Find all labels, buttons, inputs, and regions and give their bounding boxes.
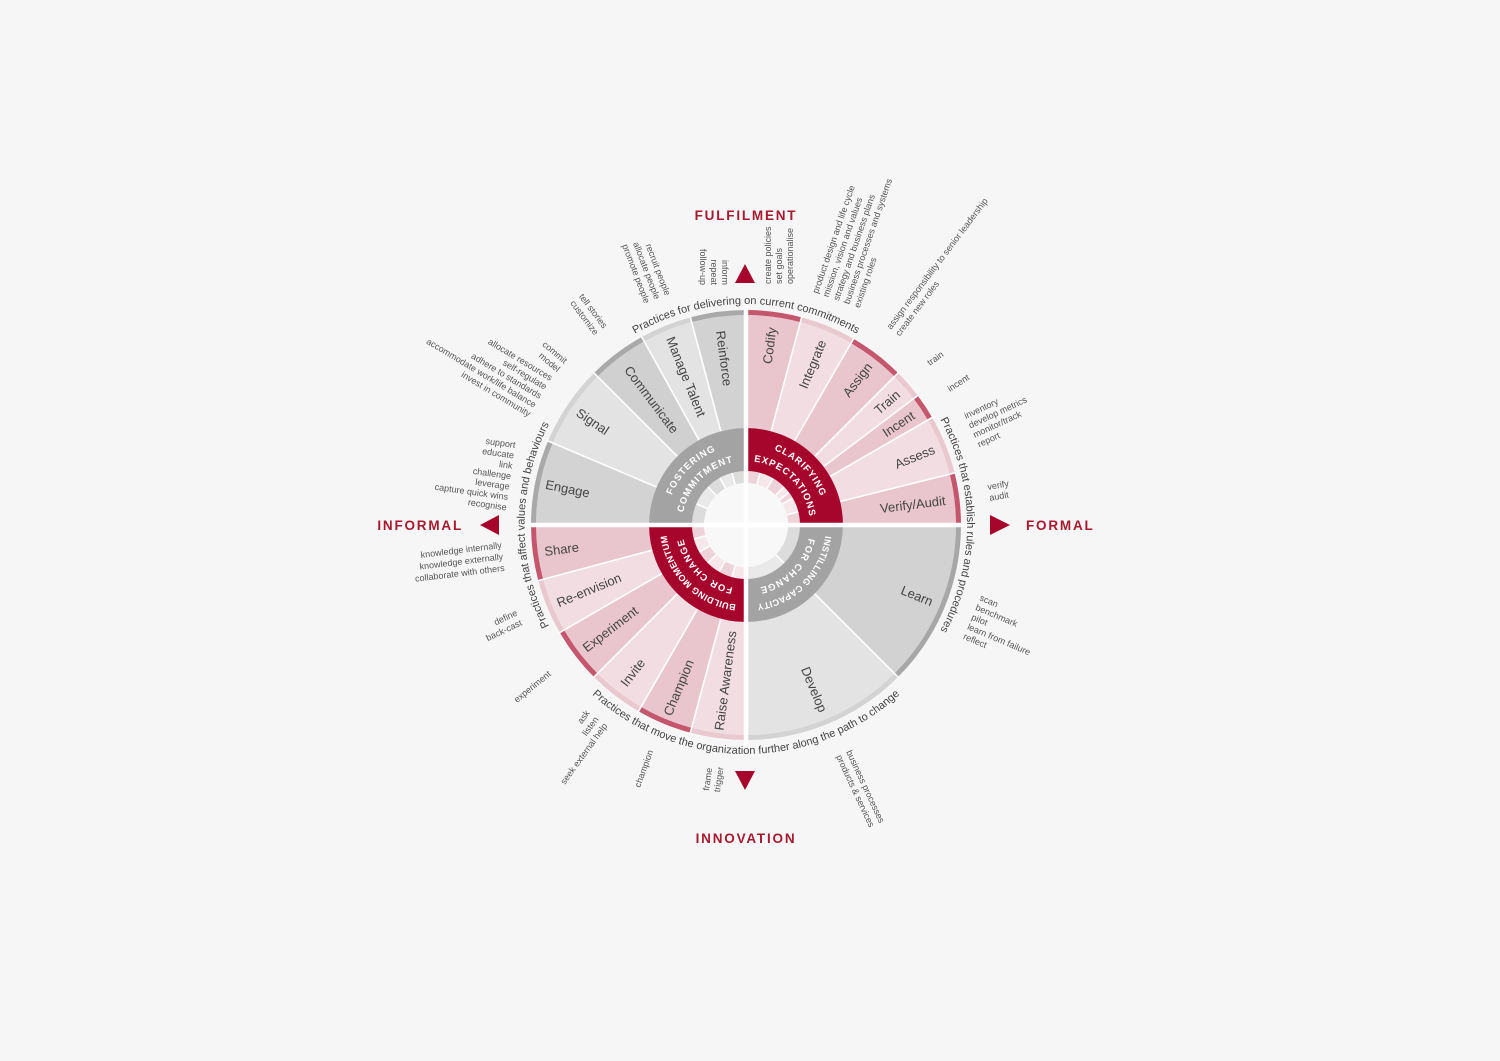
annotations: model bbox=[537, 351, 562, 374]
annotations: create new roles bbox=[893, 279, 941, 338]
annotations: scan bbox=[978, 593, 1000, 609]
annotations: incent bbox=[946, 372, 972, 394]
annotations: benchmark bbox=[974, 602, 1019, 629]
axis label: Formal bbox=[990, 515, 1095, 535]
annotations: promote people bbox=[620, 243, 652, 305]
wedge labels: Develop bbox=[798, 665, 830, 714]
annotations: support bbox=[485, 436, 517, 450]
category ring: Fostering Commitment: FOSTERING bbox=[666, 446, 714, 495]
annotations: experiment bbox=[512, 668, 553, 705]
annotations: develop metrics bbox=[967, 394, 1029, 430]
annotations: set goals bbox=[774, 247, 784, 284]
annotations: educate bbox=[482, 446, 515, 460]
annotations: train bbox=[925, 349, 945, 368]
annotations: commit bbox=[540, 339, 570, 366]
annotations bbox=[412, 166, 1044, 830]
category ring: Building Momentum for Change: BUILDING MOMENTUM bbox=[660, 536, 736, 610]
wedge: Invite bbox=[456, 235, 1036, 815]
annotations: challenge bbox=[472, 466, 512, 481]
wedge: Engage bbox=[534, 312, 958, 738]
wedge labels: Signal bbox=[573, 405, 612, 438]
arc text: left: Practices that affect values and behaviours bbox=[516, 422, 549, 629]
wedge: Integrate bbox=[486, 265, 1006, 785]
category ring: Instilling Capacity for Change: INSTILLING CAPACITY bbox=[758, 536, 832, 610]
wedge labels: Champion bbox=[660, 657, 697, 718]
wedge labels: Invite bbox=[617, 656, 648, 689]
wedge labels: Communicate bbox=[621, 363, 682, 436]
axis label: Fulfilment bbox=[695, 208, 797, 283]
arc text: bottom: Practices that move the organization further along the path to change bbox=[592, 689, 899, 754]
category ring: Clarifying Expectations: CLARIFYING bbox=[775, 445, 826, 496]
arc text: top: Practices for delivering on current commitments bbox=[632, 296, 859, 334]
wedge labels: Integrate bbox=[796, 338, 829, 391]
axis label: Formal: FORMAL bbox=[1026, 518, 1095, 533]
annotations: listen bbox=[580, 715, 601, 738]
annotations: leverage bbox=[475, 477, 510, 492]
category ring: Instilling Capacity for Change: FOR CHANGE bbox=[760, 538, 815, 594]
annotations: invest in community bbox=[460, 369, 533, 419]
annotations: tell stories bbox=[577, 292, 610, 331]
wedge: Raise Awareness bbox=[534, 312, 958, 738]
annotations: ask bbox=[575, 708, 592, 726]
annotations: link bbox=[498, 459, 514, 471]
annotations: product design and life cycle bbox=[810, 184, 857, 295]
annotations: champion bbox=[632, 749, 655, 789]
wedge: Codify bbox=[534, 312, 958, 738]
wedge labels bbox=[543, 326, 947, 731]
wedge: Assign bbox=[456, 235, 1036, 815]
wedge labels: Re-envision bbox=[554, 570, 624, 610]
wedge labels: Engage bbox=[544, 477, 591, 501]
annotations: frame bbox=[701, 767, 714, 791]
annotations: recruit people bbox=[644, 242, 672, 297]
annotations: adhere to standards bbox=[470, 351, 544, 401]
annotations: assign responsibility to senior leadership bbox=[885, 196, 990, 331]
wedge labels: Share bbox=[543, 540, 580, 559]
annotations: business processes and systems bbox=[842, 177, 894, 305]
category ring: Clarifying Expectations bbox=[748, 428, 843, 523]
axis label: Fulfilment: FULFILMENT bbox=[695, 208, 797, 223]
wedge: Reinforce bbox=[486, 265, 1006, 785]
axis label: Innovation bbox=[696, 771, 796, 846]
wedge: Experiment bbox=[445, 224, 1047, 826]
wedge labels: Verify/Audit bbox=[879, 493, 947, 516]
wedge: Learn bbox=[534, 312, 958, 738]
annotations: knowledge externally bbox=[419, 551, 504, 572]
wedge labels: Manage Talent bbox=[663, 334, 709, 419]
wedge: Share bbox=[486, 265, 1006, 785]
wedge: Train bbox=[445, 224, 1047, 826]
category ring: Fostering Commitment: COMMITMENT bbox=[678, 456, 732, 512]
annotations: self-regulate bbox=[501, 358, 549, 392]
annotations: verify bbox=[987, 478, 1010, 492]
annotations: seek external help bbox=[558, 721, 609, 786]
annotations: allocate resources bbox=[486, 337, 555, 383]
annotations: strategy and business plans bbox=[831, 193, 877, 302]
wedge: Assess bbox=[456, 235, 1036, 815]
annotations: customize bbox=[568, 298, 601, 337]
wedge labels: Assess bbox=[893, 442, 937, 472]
annotations: capture quick wins bbox=[434, 482, 509, 502]
wedge labels: Train bbox=[871, 387, 903, 418]
wheel bbox=[525, 304, 967, 746]
wedge labels: Raise Awareness bbox=[712, 630, 740, 731]
wedge: Manage Talent bbox=[457, 236, 1035, 814]
annotations: allocate people bbox=[631, 241, 662, 301]
annotations: knowledge internally bbox=[420, 540, 503, 560]
annotations: learn from failure bbox=[966, 622, 1032, 657]
wedge: Verify/Audit bbox=[488, 267, 1004, 783]
category ring: Instilling Capacity for Change bbox=[748, 527, 843, 622]
wedge: Communicate bbox=[445, 224, 1047, 826]
annotations: pilot bbox=[970, 612, 990, 628]
annotations: recognise bbox=[467, 497, 507, 512]
annotations: products & services bbox=[834, 753, 877, 829]
wedge labels: Experiment bbox=[580, 603, 641, 655]
wedge: Develop bbox=[445, 224, 1047, 826]
annotations: existing roles bbox=[852, 256, 879, 309]
category ring: Fostering Commitment bbox=[649, 428, 744, 523]
annotations: reflect bbox=[962, 631, 989, 650]
annotations: inventory bbox=[963, 396, 1000, 421]
annotations: trigger bbox=[712, 766, 725, 793]
annotations: operationalise bbox=[785, 228, 795, 284]
category ring: Clarifying Expectations: EXPECTATIONS bbox=[754, 455, 816, 516]
annotations: repeat bbox=[709, 259, 719, 285]
wedge: Champion bbox=[486, 265, 1006, 785]
wedge labels: Reinforce bbox=[713, 330, 735, 387]
annotations: inform bbox=[720, 260, 730, 285]
annotations: monitor/track bbox=[971, 409, 1023, 440]
annotations: mission, vision and values bbox=[821, 196, 864, 298]
annotations: define bbox=[492, 608, 519, 627]
wedge labels: Incent bbox=[880, 408, 918, 440]
wedge: Signal bbox=[467, 246, 1025, 804]
wedge labels: Codify bbox=[760, 326, 780, 365]
annotations: business processes bbox=[844, 749, 887, 825]
wedge: Incent bbox=[448, 227, 1044, 823]
annotations: collaborate with others bbox=[414, 563, 506, 584]
annotations: audit bbox=[989, 489, 1010, 503]
axis label: Informal bbox=[377, 515, 499, 535]
annotations: follow-up bbox=[698, 249, 708, 285]
category ring: Building Momentum for Change bbox=[649, 527, 744, 622]
annotations: back-cast bbox=[484, 618, 524, 643]
annotations: accommodate work/life balance bbox=[425, 336, 538, 410]
axis label: Innovation: INNOVATION bbox=[696, 831, 796, 846]
annotations: create policies bbox=[763, 226, 773, 284]
category ring: Building Momentum for Change: FOR CHANGE bbox=[677, 540, 732, 594]
axis label: Informal: INFORMAL bbox=[377, 518, 463, 533]
wedge labels: Assign bbox=[840, 360, 875, 400]
annotations: report bbox=[976, 430, 1002, 449]
wedge: Re-envision bbox=[456, 235, 1036, 815]
wedge labels: Learn bbox=[899, 583, 935, 609]
arc text: right: Practices that establish rules and procedures bbox=[940, 416, 976, 632]
